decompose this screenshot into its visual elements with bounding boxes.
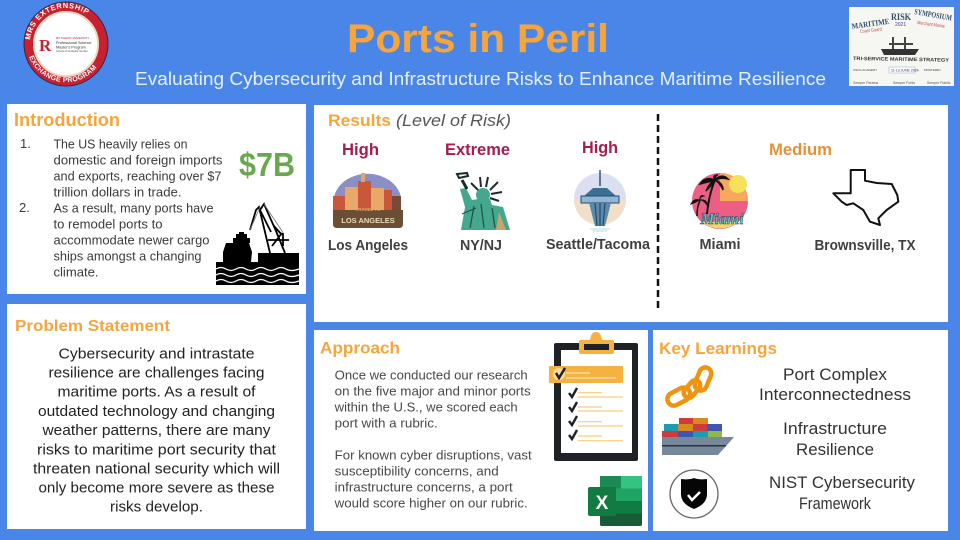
approach body text: would score higher on our rubric. — [334, 495, 528, 510]
image: Maritime Risk Symposium poster: 2021 — [895, 22, 906, 28]
numbered list: 2. — [19, 200, 30, 215]
icon: MRS Externship Exchange Program badge: EXCHANGE PROGRAM — [29, 55, 96, 82]
problem statement body text: resilience are challenges facing — [48, 365, 264, 382]
risk level: Seattle/Tacoma high: High — [582, 138, 618, 157]
learning: port complex interconnectedness: Port Complex — [783, 366, 888, 384]
numbered list: accommodate newer cargo — [54, 232, 210, 247]
icon: container ship — [662, 418, 734, 455]
problem statement body text: only become more severe as these — [38, 480, 274, 497]
panel: problem statement — [7, 304, 306, 529]
icon: MRS Externship Exchange Program badge: Master's Program — [56, 46, 86, 50]
problem statement body text: risks to maritime port security that — [37, 441, 277, 458]
divider — [657, 114, 659, 312]
numbered list: to remodel ports to — [54, 216, 162, 231]
icon: Excel: X — [596, 493, 609, 514]
icon: Los Angeles badge: TRAVEL TO — [355, 207, 381, 212]
heading: results: (Level of Risk) — [396, 111, 511, 130]
numbered list: The US heavily relies on — [54, 136, 188, 151]
heading: problem statement: Problem Statement — [15, 318, 170, 335]
panel: introduction — [7, 104, 306, 294]
numbered list — [19, 136, 223, 279]
problem statement body text: Cybersecurity and intrastate — [58, 345, 254, 362]
numbered list: domestic and foreign imports — [54, 152, 223, 167]
icon: security shield — [670, 470, 718, 518]
learning: NIST cybersecurity framework: NIST Cybersecurity — [769, 474, 916, 492]
image: Maritime Risk Symposium poster: Semper Paratus — [853, 81, 879, 85]
image: Maritime Risk Symposium poster: MONTEREY — [924, 68, 941, 72]
problem statement body text: outdated technology and changing — [38, 403, 275, 420]
panel: key learnings — [653, 330, 948, 531]
approach body text: on the five major and minor ports — [335, 383, 531, 398]
risk level: Miami medium: Medium — [769, 140, 832, 159]
icon: Excel — [588, 476, 642, 526]
callout: $7B: $7B — [239, 146, 295, 183]
icon: Los Angeles badge: LOS ANGELES — [341, 216, 395, 225]
icon: MRS Externship Exchange Program badge: MRS EXTERNSHIP — [25, 2, 89, 40]
approach body text: Once we conducted our research — [335, 367, 528, 382]
heading: approach: Approach — [320, 338, 400, 358]
icon: Miami sunset palm: Miami — [699, 211, 744, 228]
image: Maritime Risk Symposium poster — [849, 7, 954, 86]
subtitle: Evaluating Cybersecurity and Infrastructure Risks to Enhance Maritime Resilience — [135, 69, 826, 89]
numbered list: ships amongst a changing — [54, 248, 202, 263]
icon: Statue of Liberty — [457, 173, 510, 230]
image: Maritime Risk Symposium poster: Semper Fidelis — [927, 81, 951, 85]
numbered list: As a result, many ports have — [54, 200, 214, 215]
icon: MRS Externship Exchange Program badge: RUTGERS UNIVERSITY — [56, 36, 90, 40]
title: Ports in Peril — [347, 17, 609, 61]
problem statement body text: risks develop. — [110, 499, 203, 516]
approach body text: For known cyber disruptions, vast — [335, 447, 532, 462]
heading: results — [328, 111, 511, 130]
icon: Texas outline — [833, 170, 898, 225]
approach body text — [334, 367, 532, 510]
icon: Miami sunset palm — [691, 173, 748, 229]
label: NY/NJ: NY/NJ — [460, 238, 502, 254]
label: Los Angeles: Los Angeles — [328, 238, 408, 254]
problem statement body text: threaten national security which will — [33, 460, 280, 477]
image: Maritime Risk Symposium poster: Merchant Marine — [917, 20, 945, 30]
learning: port complex interconnectedness: Interconnectedness — [759, 386, 911, 404]
icon: clipboard checklist — [549, 332, 638, 461]
icon: cargo ship and port cranes — [216, 204, 299, 285]
icon: Seattle Space Needle — [574, 170, 626, 232]
risk level: NY/NJ extreme: Extreme — [445, 140, 510, 159]
label: Miami: Miami — [700, 237, 740, 253]
heading: key learnings: Key Learnings — [659, 339, 777, 358]
icon: MRS Externship Exchange Program badge: R — [39, 36, 52, 55]
problem statement body text: weather patterns, there are many — [41, 422, 271, 439]
icon: MRS Externship Exchange Program badge: Professional Science — [56, 41, 91, 45]
heading: results: Results — [328, 111, 391, 130]
numbered list: 1. — [20, 136, 31, 151]
approach body text: within the U.S., we scored each — [334, 399, 518, 414]
icon: chain links — [665, 366, 713, 408]
icon: MRS Externship Exchange Program badge: School of Graduate Studies — [56, 49, 88, 53]
heading: introduction: Introduction — [14, 110, 120, 130]
risk level: Los Angeles high: High — [342, 140, 379, 159]
learning: NIST cybersecurity framework: Framework — [799, 495, 872, 513]
problem statement body text: maritime ports. As a result of — [58, 384, 256, 401]
image: Maritime Risk Symposium poster: Semper Fortis — [893, 81, 915, 85]
image: Maritime Risk Symposium poster: TRI-SERVICE MARITIME STRATEGY — [853, 56, 950, 64]
learning: infrastructure resilience: Infrastructure — [783, 420, 887, 438]
numbered list: trillion dollars in trade. — [54, 184, 182, 199]
approach body text: infrastructure concerns, a port — [335, 479, 513, 494]
learning: port complex interconnectedness — [759, 366, 911, 404]
approach body text: susceptibility concerns, and — [335, 463, 499, 478]
label: Seattle/Tacoma: Seattle/Tacoma — [546, 237, 651, 253]
image: Maritime Risk Symposium poster: 11-13 JUNE 2024 — [891, 68, 919, 72]
learning: infrastructure resilience: Resilience — [796, 441, 874, 459]
image: Maritime Risk Symposium poster: USCG ACADEMY — [853, 68, 877, 72]
numbered list: and exports, reaching over $7 — [54, 168, 222, 183]
image: Maritime Risk Symposium poster: MARITIME — [851, 17, 890, 31]
learning: infrastructure resilience — [783, 420, 887, 459]
label: Brownsville, TX: Brownsville, TX — [814, 238, 916, 254]
approach body text: port with a rubric. — [335, 415, 438, 430]
problem statement body text — [33, 345, 280, 516]
panel: approach — [314, 330, 648, 531]
learning: NIST cybersecurity framework — [769, 474, 916, 513]
image: Maritime Risk Symposium poster: Coast Guard — [860, 27, 882, 35]
panel: results — [314, 105, 948, 322]
icon: Los Angeles badge — [333, 173, 403, 228]
image: Maritime Risk Symposium poster: RISK — [891, 12, 911, 22]
icon: MRS Externship Exchange Program badge — [24, 2, 108, 86]
numbered list: climate. — [54, 264, 98, 279]
